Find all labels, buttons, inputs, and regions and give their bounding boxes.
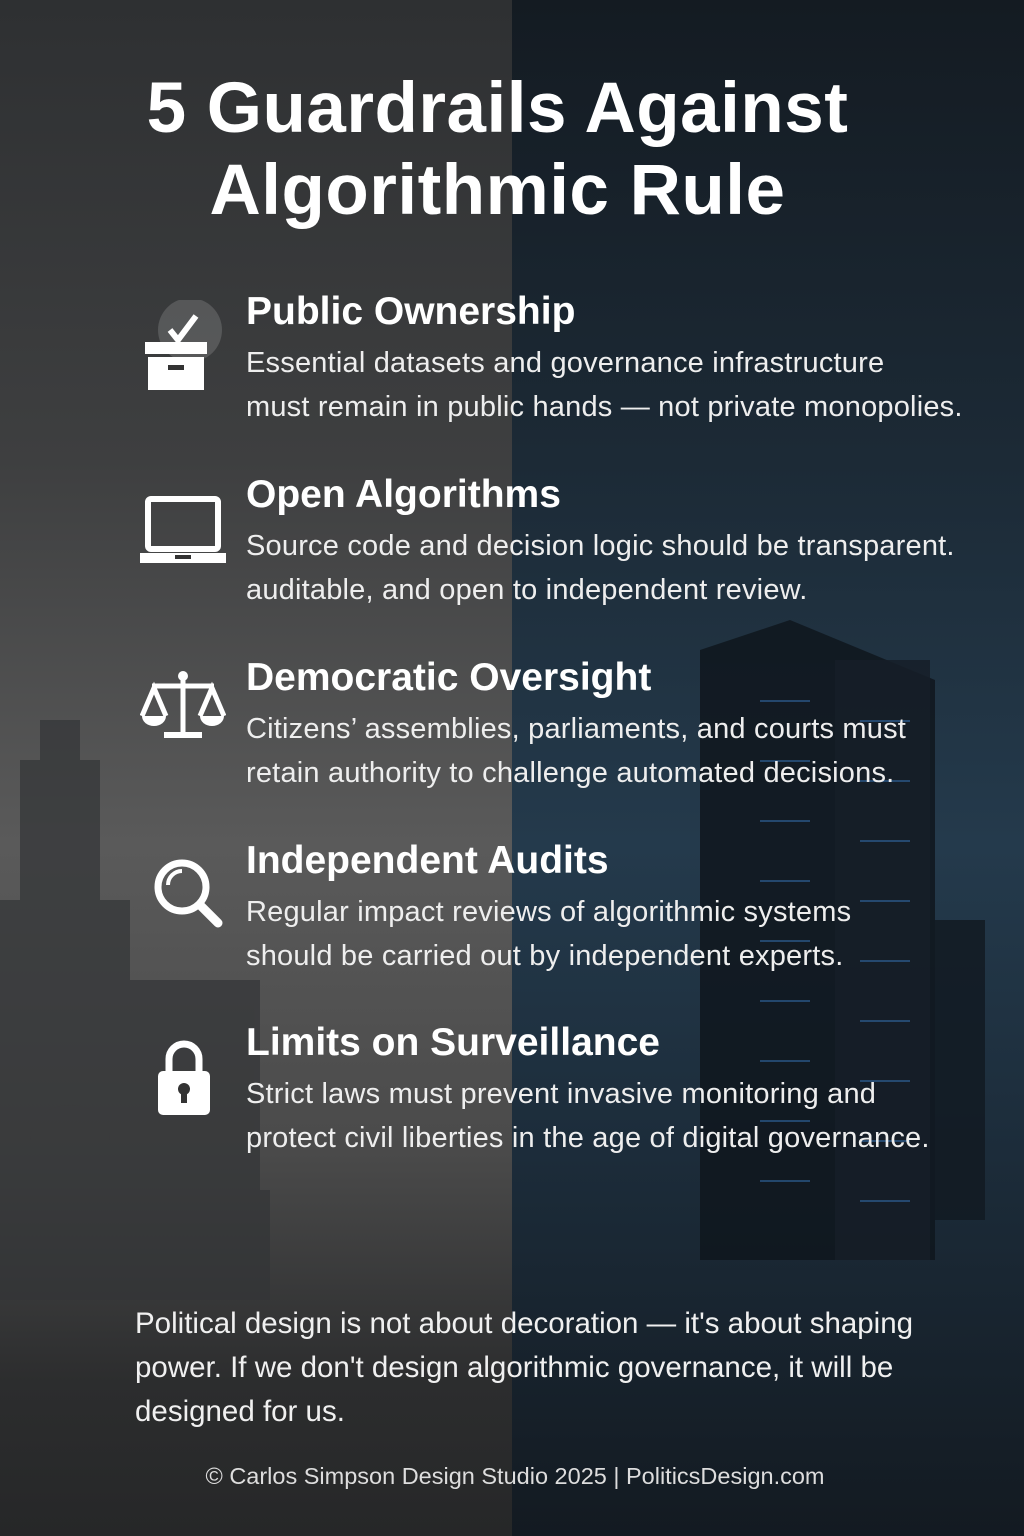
icon: laptop (140, 496, 226, 563)
item: democratic oversight: Democratic Oversight (246, 656, 651, 699)
title: 5 Guardrails Against (147, 69, 848, 148)
title: Algorithmic Rule (209, 151, 786, 230)
item: independent audits: Independent Audits (246, 839, 609, 882)
item: democratic oversight: Citizens’ assemblies, parliaments, and courts must (246, 713, 906, 745)
item: public ownership: must remain in public hands — not private monopolies. (246, 391, 963, 423)
item: democratic oversight: retain authority to challenge automated decisions. (246, 757, 894, 789)
item: independent audits (154, 839, 851, 972)
icon: ballot box (145, 300, 222, 390)
item: limits on surveillance: Limits on Surveillance (246, 1021, 660, 1064)
icon: scales (140, 671, 226, 738)
item: limits on surveillance: Strict laws must prevent invasive monitoring and (246, 1078, 876, 1110)
item: open algorithms: Open Algorithms (246, 473, 561, 516)
title (147, 69, 848, 230)
item: open algorithms: auditable, and open to independent review. (246, 574, 807, 606)
icon: padlock (158, 1040, 210, 1115)
item: limits on surveillance (158, 1021, 930, 1154)
item: open algorithms: Source code and decision logic should be transparent. (246, 530, 955, 562)
item: independent audits: should be carried out by independent experts. (246, 940, 843, 972)
item: public ownership: Public Ownership (246, 290, 575, 333)
item: democratic oversight (140, 656, 906, 789)
item: public ownership (145, 290, 963, 423)
footer: © Carlos Simpson Design Studio 2025 | PoliticsDesign.com (205, 1463, 825, 1489)
item: open algorithms (140, 473, 955, 606)
icon: magnifier (154, 860, 222, 928)
closing statement: Political design is not about decoration — it's about shaping power. If we don't design algorithmic governance, it will be designed for us. (135, 1307, 913, 1428)
item: limits on surveillance: protect civil liberties in the age of digital governance. (246, 1122, 930, 1154)
item: public ownership: Essential datasets and governance infrastructure (246, 347, 884, 379)
item: independent audits: Regular impact reviews of algorithmic systems (246, 896, 851, 928)
